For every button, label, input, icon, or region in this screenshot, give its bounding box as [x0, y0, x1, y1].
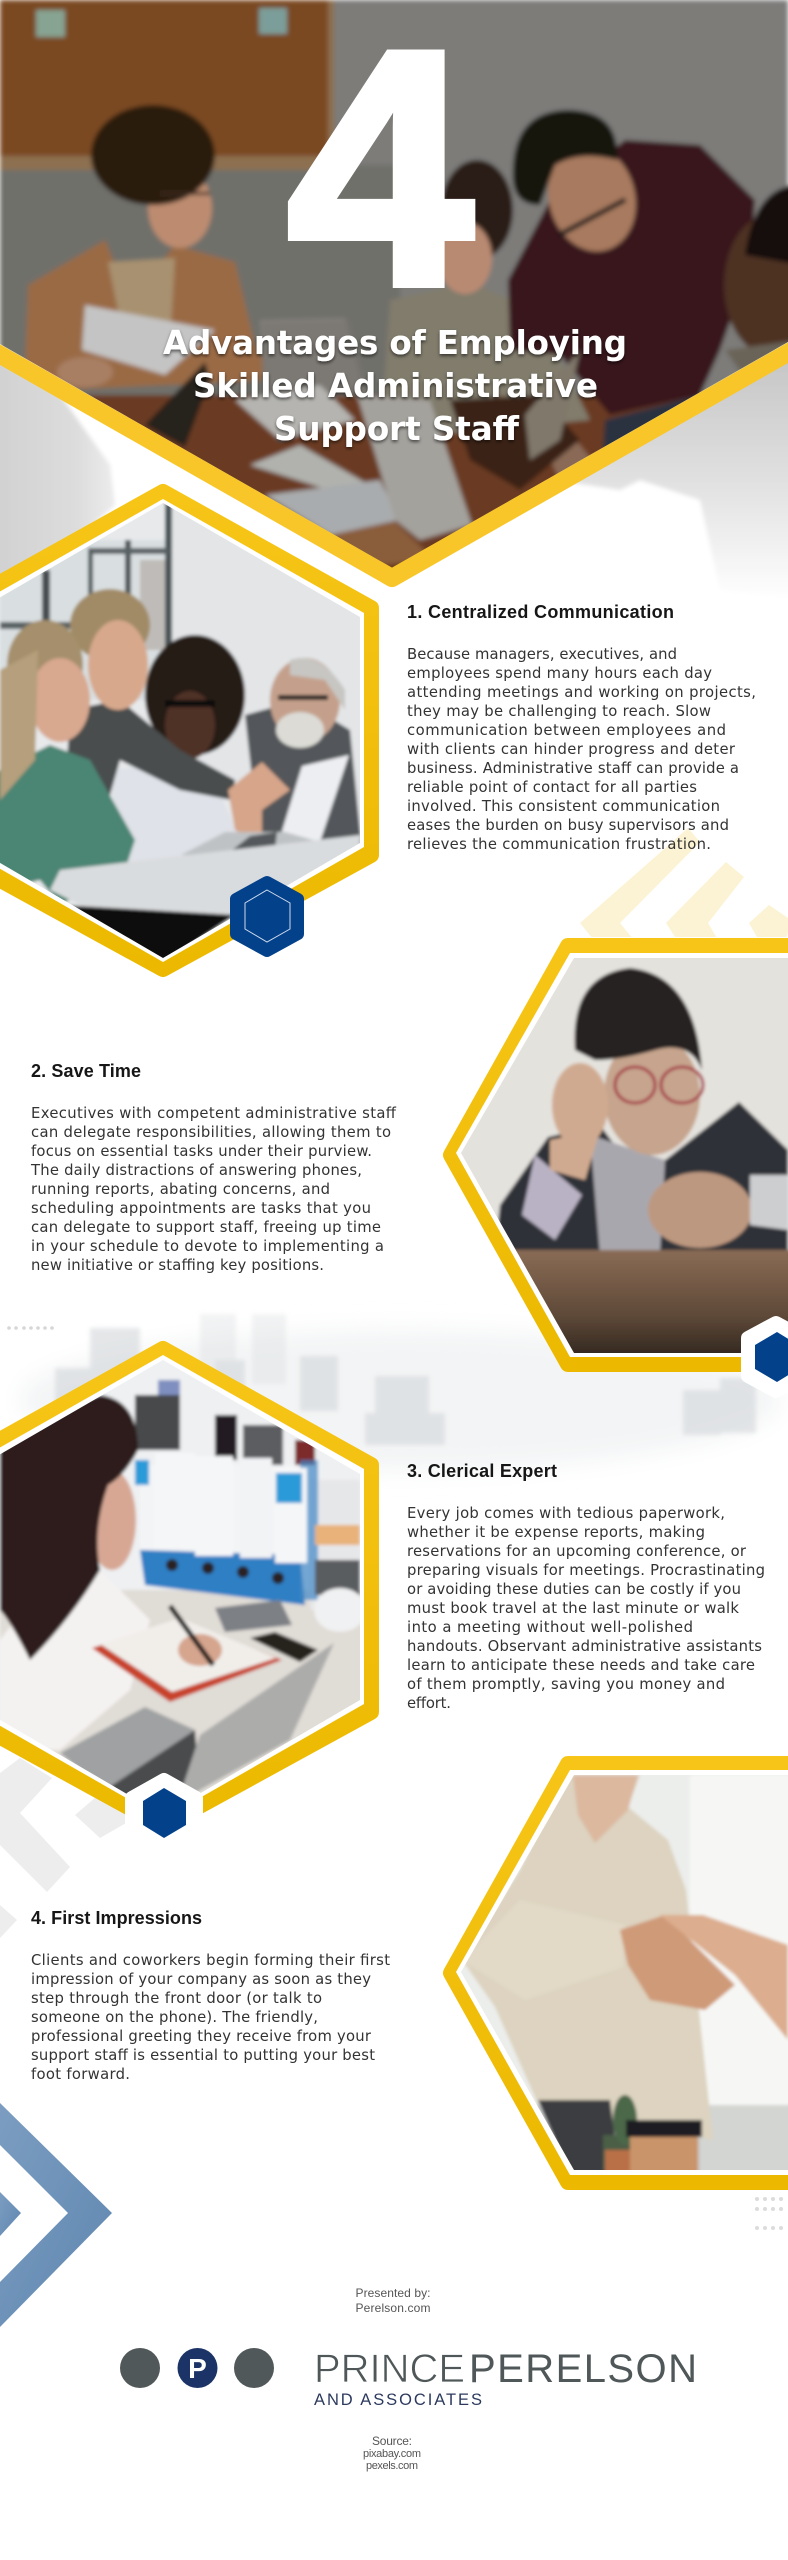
text block: 1: they may be challenging to reach. Slow — [407, 703, 711, 720]
text block: 3: into a meeting without well-polished — [407, 1619, 693, 1636]
text block: 2: running reports, abating concerns, and — [31, 1181, 330, 1198]
title: Advantages of Employing — [163, 324, 627, 362]
text block: 4 — [31, 1952, 390, 2083]
panel: hexagon 4 image — [450, 1764, 788, 2182]
text block: 3 — [407, 1505, 765, 1712]
hexagon 1 yellow frame — [0, 492, 371, 969]
hexagon 3 yellow frame — [0, 1349, 371, 1826]
text block: 1: Because managers, executives, and — [407, 646, 677, 663]
text block: 3: of them promptly, saving you money and — [407, 1676, 725, 1693]
heading: 2: 2. Save Time — [31, 1061, 141, 1081]
logo: Prince Perelson and Associates: PERELSON — [469, 2347, 697, 2391]
text block: 1: relieves the communication frustration. — [407, 836, 711, 853]
dots: right rows — [755, 2197, 783, 2230]
text block: 3: or avoiding these duties can be costly if you — [407, 1581, 741, 1598]
hexagon 4 yellow frame — [451, 1764, 788, 2182]
text block: 3: learn to anticipate these needs and take care — [407, 1657, 755, 1674]
footer: source: pexels.com — [366, 2460, 418, 2472]
decorative grey chevrons — [0, 1758, 140, 1938]
heading: 4: 4. First Impressions — [31, 1908, 202, 1928]
footer: source — [363, 2434, 421, 2472]
hexagon 2 yellow frame — [451, 946, 788, 1364]
heading: 1: 1. Centralized Communication — [407, 602, 674, 622]
text block: 3: reservations for an upcoming conference, or — [407, 1543, 747, 1560]
title: Support Staff — [274, 410, 520, 448]
text block: 1: employees spend many hours each day — [407, 665, 712, 682]
text block: 2: Executives with competent administrative staff — [31, 1105, 397, 1122]
header yellow V band — [0, 347, 788, 578]
text block: 2: new initiative or staffing key positions. — [31, 1257, 324, 1274]
background: city skyline fog — [20, 1314, 780, 1470]
text block: 4: someone on the phone). The friendly, — [31, 2009, 318, 2026]
text block: 3: effort. — [407, 1695, 451, 1712]
decorative blue chevrons — [0, 2103, 112, 2327]
badge: blue hexagon 1 — [236, 882, 298, 951]
logo circles: P — [188, 2353, 207, 2384]
text block: 4: foot forward. — [31, 2066, 130, 2083]
text block: 1: eases the burden on busy supervisors and — [407, 817, 729, 834]
title — [163, 324, 627, 448]
badge: blue hexagon 2 — [748, 1323, 788, 1391]
text block: 1: business. Administrative staff can provide a — [407, 760, 739, 777]
text block: 2: focus on essential tasks under their purview. — [31, 1143, 372, 1160]
footer: presented by: Presented by: — [356, 2286, 430, 2300]
footer: source: pixabay.com — [363, 2448, 421, 2460]
panel: hexagon 2 image — [450, 946, 788, 1370]
text block: 2: can delegate to support staff, freeing up time — [31, 1219, 381, 1236]
text block: 3: preparing visuals for meetings. Procrastinating — [407, 1562, 765, 1579]
dots: left row — [7, 1326, 54, 1330]
text block: 2: scheduling appointments are tasks that you — [31, 1200, 371, 1217]
text block: 4: step through the front door (or talk to — [31, 1990, 322, 2007]
logo: Prince Perelson and Associates — [120, 2347, 697, 2409]
text block: 2: can delegate responsibilities, allowing them to — [31, 1124, 391, 1141]
hero photo: team meeting — [0, 0, 788, 575]
text block: 4: support staff is essential to putting your best — [31, 2047, 375, 2064]
badge: blue hexagon 3 — [132, 1780, 196, 1846]
panel: hexagon 1 image — [0, 492, 380, 970]
text block: 3: handouts. Observant administrative assistants — [407, 1638, 762, 1655]
text block: 3: Every job comes with tedious paperwork, — [407, 1505, 725, 1522]
text block: 4: professional greeting they receive from your — [31, 2028, 372, 2045]
text block: 2: in your schedule to devote to implementing a — [31, 1238, 384, 1255]
logo: Prince Perelson and Associates: AND ASSOCIATES — [314, 2391, 482, 2409]
text block: 4: Clients and coworkers begin forming their first — [31, 1952, 390, 1969]
text block: 1: with clients can hinder progress and deter — [407, 741, 736, 758]
heading: 3: 3. Clerical Expert — [407, 1461, 557, 1481]
text block: 4: impression of your company as soon as they — [31, 1971, 371, 1988]
text block: 2 — [30, 1105, 397, 1274]
text block: 1: communication between employees and — [407, 722, 726, 739]
text block: 2: The daily distractions of answering phones, — [30, 1162, 362, 1179]
text block: 1: reliable point of contact for all parties — [407, 779, 697, 796]
logo: Prince Perelson and Associates: PRINCE — [314, 2347, 465, 2391]
panel: hexagon 3 image — [0, 1349, 380, 1826]
title: Skilled Administrative — [193, 367, 598, 405]
footer: presented by: Perelson.com — [356, 2301, 430, 2315]
footer: presented by — [356, 2286, 430, 2315]
footer: source: Source: — [372, 2434, 412, 2448]
text block: 1: attending meetings and working on projects, — [407, 684, 756, 701]
logo circles — [120, 2348, 274, 2388]
background: pale yellow chevrons — [580, 828, 788, 937]
background: grey texture under header — [0, 340, 788, 600]
text block: 3: must book travel at the last minute or walk — [407, 1600, 739, 1617]
text block: 1: involved. This consistent communication — [407, 798, 720, 815]
text block: 3: whether it be expense reports, making — [407, 1524, 705, 1541]
text block: 1 — [407, 646, 756, 853]
